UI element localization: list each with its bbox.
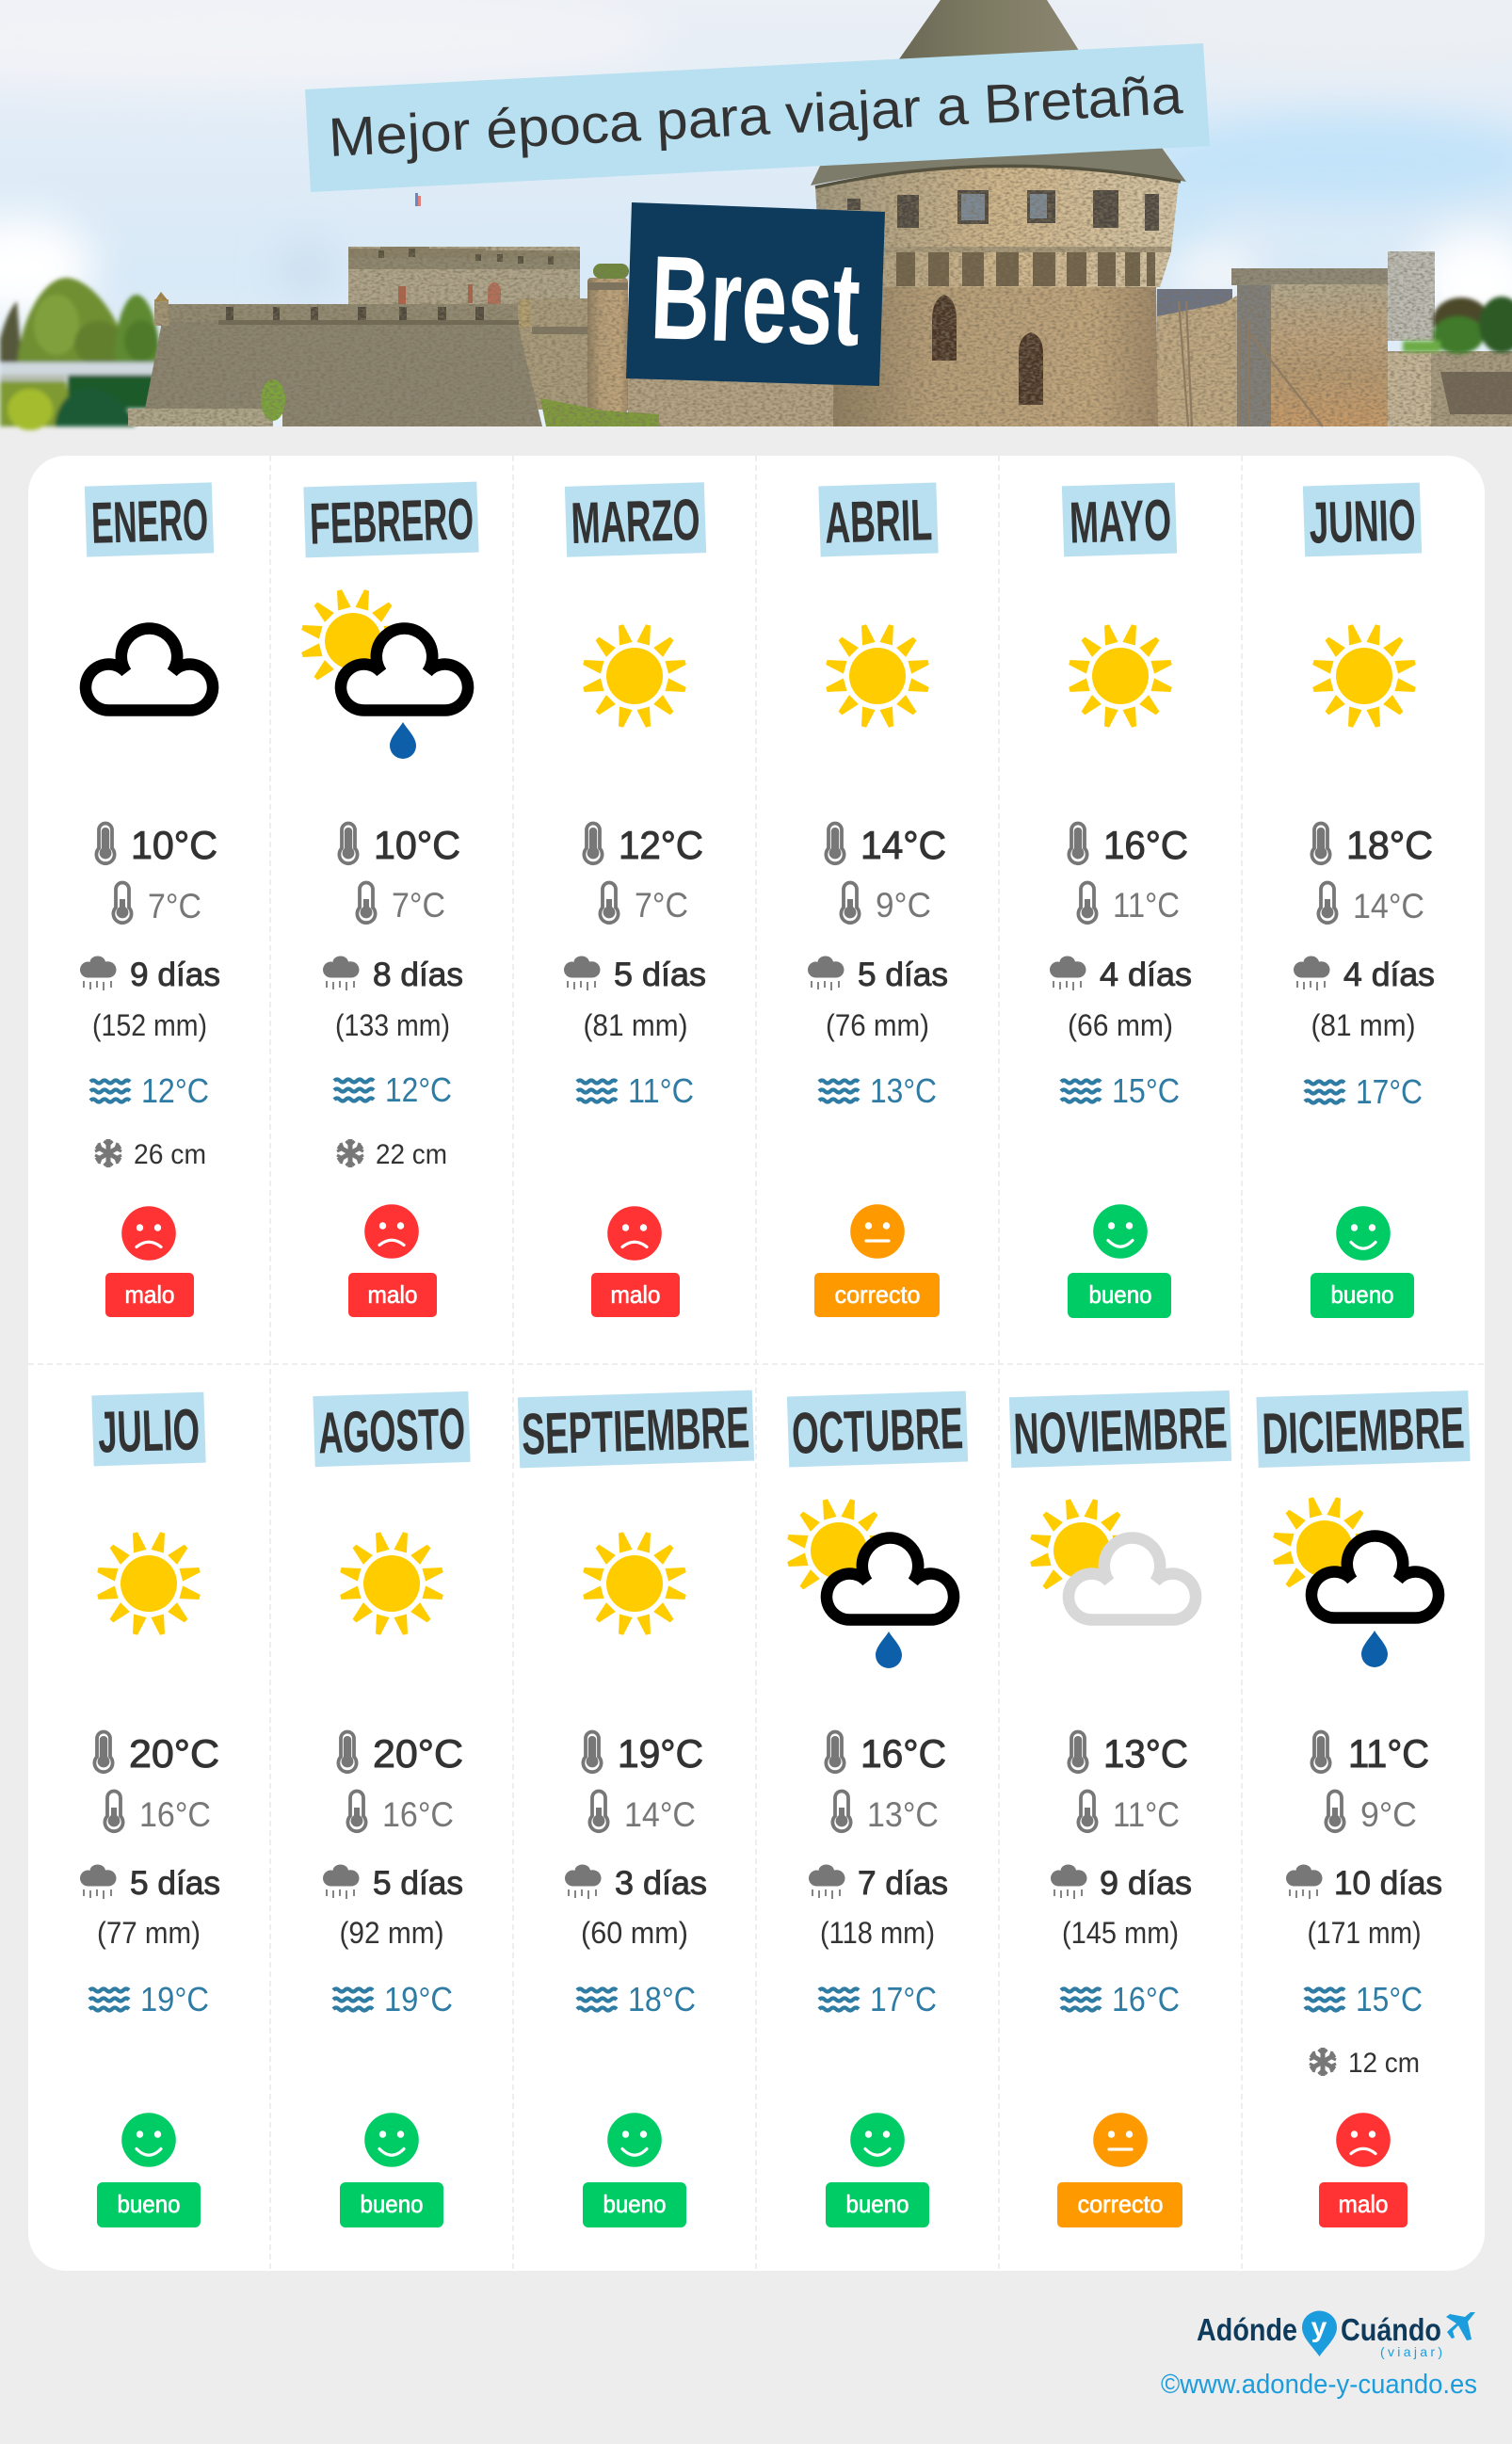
sea temperature [1061, 1980, 1180, 2018]
max temperature: 18°C [1346, 823, 1433, 867]
snow [95, 1139, 206, 1170]
rain days: 8 días [373, 957, 463, 993]
sea temperature: 18°C [628, 1980, 696, 2018]
rain days [565, 1865, 707, 1902]
min temperature [1318, 883, 1424, 925]
min temperature: 11°C [1113, 1795, 1180, 1834]
max temperature: 10°C [131, 823, 217, 867]
min temperature [1078, 1791, 1180, 1834]
right buildings [1157, 289, 1232, 317]
boat masts [1179, 301, 1323, 426]
rain days [564, 957, 706, 993]
rain days: 5 días [858, 957, 948, 993]
rain days [80, 957, 220, 993]
icon: sun, cloud and rain [300, 588, 468, 759]
panel: Marzo [564, 482, 706, 1317]
panel: Octubre [786, 1391, 968, 2227]
sea temperature [819, 1980, 937, 2018]
min temperature: 7°C [392, 886, 445, 925]
rating: malo: malo [610, 1280, 661, 1309]
rating: bueno [340, 2113, 443, 2227]
month heading: OCTUBRE [791, 1396, 964, 1467]
icon: map pin [1302, 2310, 1337, 2356]
sea temperature [577, 1980, 696, 2018]
rain days: 3 días [615, 1865, 707, 1902]
max temperature [826, 823, 946, 867]
month heading [818, 483, 939, 556]
rating: bueno: bueno [1088, 1280, 1152, 1309]
rainfall: (81 mm) [584, 1008, 687, 1042]
flag [415, 193, 421, 206]
rating: bueno [97, 2113, 201, 2227]
windows [847, 190, 1159, 231]
rainfall: (118 mm) [820, 1916, 935, 1950]
min temperature: 11°C [1113, 886, 1180, 925]
middle wall [517, 298, 590, 410]
max temperature: 11°C [1348, 1731, 1429, 1776]
month heading [303, 482, 479, 557]
min temperature: 7°C [635, 886, 688, 925]
sea temperature: 12°C [141, 1071, 209, 1110]
machicolations [896, 252, 1155, 286]
month heading [565, 482, 706, 557]
main tower lower [833, 282, 1158, 426]
month heading: SEPTIEMBRE [521, 1395, 750, 1468]
min temperature [1326, 1791, 1417, 1834]
rain days [809, 1865, 948, 1902]
rainfall: (76 mm) [826, 1008, 929, 1042]
icon: sun [825, 623, 930, 729]
rating: correcto [814, 1204, 940, 1317]
rating: malo: malo [367, 1280, 418, 1309]
panel: Mayo [1050, 483, 1192, 1318]
max temperature: 20°C [373, 1731, 463, 1776]
rain days: 10 días [1334, 1865, 1442, 1902]
upper round keep [348, 247, 580, 307]
rainfall: (145 mm) [1062, 1916, 1179, 1950]
min temperature [600, 883, 688, 925]
month heading [91, 1392, 206, 1466]
month heading [518, 1391, 754, 1468]
month heading [1009, 1391, 1231, 1468]
max temperature: 12°C [619, 823, 703, 867]
panel: Junio [1294, 483, 1435, 1318]
rain days: 9 días [130, 957, 220, 993]
rain days [1294, 957, 1435, 993]
city name: Brest [649, 231, 862, 371]
min temperature [832, 1791, 939, 1834]
rain days: 4 días [1100, 957, 1192, 993]
rating: correcto: correcto [834, 1280, 921, 1309]
panel: Julio [80, 1392, 220, 2227]
month heading [1062, 483, 1177, 556]
rain days: 9 días [1100, 1865, 1192, 1902]
right tower [1271, 284, 1388, 426]
sea temperature: 11°C [628, 1071, 694, 1110]
snow [337, 1139, 447, 1170]
sea temperature [89, 1980, 209, 2018]
min temperature: 16°C [139, 1795, 211, 1834]
min temperature: 9°C [876, 886, 931, 925]
city name box [626, 202, 885, 386]
icon: sun [339, 1531, 444, 1636]
max temperature: 14°C [861, 823, 946, 867]
rating: bueno: bueno [117, 2190, 181, 2218]
logo: Adónde y Cuándo: (viajar) [1380, 2344, 1442, 2359]
month heading [787, 1391, 968, 1467]
icon: cloud [86, 629, 213, 711]
snow [1310, 2048, 1420, 2079]
title banner [305, 43, 1210, 192]
sea temperature: 19°C [384, 1980, 453, 2018]
panel: monthly calendar card [28, 456, 1485, 2271]
rating: malo [105, 1206, 194, 1317]
sea temperature: 19°C [140, 1980, 209, 2018]
sea temperature: 17°C [870, 1980, 937, 2018]
sea temperature [577, 1071, 694, 1110]
rating: correcto: correcto [1077, 2190, 1164, 2218]
month heading: JULIO [97, 1397, 201, 1466]
snow: 22 cm [376, 1139, 447, 1170]
sea temperature [819, 1071, 937, 1110]
rating: bueno: bueno [1331, 1280, 1393, 1309]
max temperature: 19°C [618, 1731, 703, 1776]
max temperature: 20°C [129, 1731, 219, 1776]
rating: malo [348, 1204, 437, 1317]
panel: Enero [80, 482, 220, 1317]
max temperature [1069, 823, 1188, 867]
rainfall: (152 mm) [92, 1008, 207, 1042]
month heading [1303, 483, 1422, 556]
rating: malo: malo [1339, 2190, 1388, 2218]
rainfall: (66 mm) [1068, 1008, 1173, 1042]
rating: bueno: bueno [845, 2190, 909, 2218]
month heading: ENERO [90, 488, 209, 556]
title: Mejor época para viajar a Bretaña [327, 64, 1184, 169]
rating: malo [591, 1206, 680, 1317]
icon: map pin: y [1311, 2312, 1327, 2343]
arched windows [932, 295, 957, 361]
panel: Septiembre [518, 1391, 754, 2227]
rain days [1050, 957, 1192, 993]
min temperature: 14°C [624, 1795, 696, 1834]
logo: Adónde y Cuándo [1197, 2310, 1475, 2359]
icon: sun, cloud and rain [1272, 1496, 1439, 1667]
min temperature [589, 1791, 696, 1834]
rainfall: (133 mm) [335, 1008, 450, 1042]
month heading: MAYO [1069, 488, 1172, 556]
icon: sun [582, 623, 687, 729]
rainfall: (60 mm) [581, 1916, 688, 1950]
right trees [1403, 297, 1512, 354]
min temperature [105, 1791, 211, 1834]
rating: bueno [1311, 1206, 1414, 1318]
max temperature: 10°C [374, 823, 460, 867]
rain days [323, 957, 463, 993]
min temperature [1078, 883, 1180, 925]
sea temperature: 16°C [1112, 1980, 1180, 2018]
sea temperature: 12°C [385, 1070, 452, 1109]
min temperature [113, 883, 201, 925]
rating: bueno [1068, 1204, 1171, 1318]
sea temperature: 15°C [1356, 1980, 1423, 2018]
rain days [80, 1865, 220, 1902]
rating: correcto [1057, 2113, 1182, 2227]
small round tower [587, 278, 628, 412]
month heading: FEBRERO [309, 487, 475, 557]
rain days [1051, 1865, 1192, 1902]
main rampart [145, 322, 542, 426]
rating: bueno [826, 2113, 929, 2227]
pale far tower [1388, 251, 1435, 341]
month heading: NOVIEMBRE [1013, 1395, 1229, 1468]
sea temperature [334, 1070, 452, 1109]
rain days: 5 días [373, 1865, 463, 1902]
month heading: MARZO [571, 488, 701, 556]
rainfall: (171 mm) [1307, 1916, 1422, 1950]
max temperature [583, 1731, 703, 1776]
sea temperature [1305, 1072, 1423, 1111]
rating: bueno [583, 2113, 686, 2227]
min temperature: 13°C [867, 1795, 939, 1834]
logo: Adónde y Cuándo: Adónde [1197, 2312, 1297, 2347]
min temperature: 16°C [382, 1795, 454, 1834]
logo: Adónde y Cuándo: Cuándo [1341, 2312, 1441, 2347]
month heading: JUNIO [1309, 488, 1417, 556]
min temperature: 7°C [148, 887, 201, 925]
rainfall: (92 mm) [339, 1916, 444, 1950]
panel: Abril [808, 483, 948, 1317]
month heading: AGOSTO [317, 1397, 466, 1466]
icon: sun [1311, 623, 1417, 729]
rating: malo: malo [124, 1280, 175, 1309]
max temperature: 13°C [1103, 1731, 1188, 1776]
sea temperature [333, 1980, 453, 2018]
sea temperature: 13°C [870, 1071, 937, 1110]
rain days: 5 días [130, 1865, 220, 1902]
panel: Diciembre [1256, 1391, 1471, 2227]
rainfall: (77 mm) [97, 1916, 201, 1950]
grass [540, 398, 659, 426]
max temperature [826, 1731, 946, 1776]
rain days: 5 días [614, 957, 706, 993]
panel: Noviembre [1009, 1391, 1231, 2227]
panel: Agosto [313, 1391, 471, 2227]
max temperature [1069, 1731, 1188, 1776]
min temperature: 14°C [1353, 887, 1424, 925]
trees left [0, 278, 160, 430]
month heading [85, 482, 214, 557]
max temperature: 16°C [861, 1731, 946, 1776]
snow: 12 cm [1348, 2048, 1420, 2079]
max temperature [1311, 1731, 1429, 1776]
sea temperature [90, 1071, 209, 1110]
conical roof [894, 0, 1083, 66]
rain days: 4 días [1343, 957, 1435, 993]
min temperature [347, 1791, 454, 1834]
max temperature [584, 823, 703, 867]
month heading [313, 1391, 471, 1467]
rain days: 7 días [858, 1865, 948, 1902]
min temperature: 9°C [1360, 1795, 1417, 1834]
upper drum [815, 165, 1179, 287]
icon: sun [1068, 623, 1173, 729]
icon: sun, cloud and rain [786, 1498, 954, 1668]
rain days [808, 957, 948, 993]
sea temperature: 17°C [1356, 1072, 1423, 1111]
sea temperature: 15°C [1112, 1071, 1180, 1110]
header photo: Brest castle [0, 0, 1512, 430]
rating: malo [1319, 2113, 1407, 2227]
rain days [1286, 1865, 1442, 1902]
max temperature: 16°C [1103, 823, 1188, 867]
sea temperature [1061, 1071, 1180, 1110]
icon: sun [582, 1531, 687, 1636]
min temperature [841, 883, 931, 925]
rain days [323, 1865, 463, 1902]
icon: plane [1446, 2312, 1475, 2340]
rainfall: (81 mm) [1311, 1008, 1416, 1042]
month heading: ABRIL [824, 488, 933, 556]
icon: sun [96, 1531, 201, 1636]
sea temperature [1305, 1980, 1423, 2018]
rating: bueno: bueno [603, 2190, 667, 2218]
panel: Febrero [300, 482, 479, 1317]
icon: sun and light cloud [1029, 1498, 1196, 1620]
rating: bueno: bueno [360, 2190, 424, 2218]
min temperature [357, 883, 445, 925]
snow: 26 cm [134, 1139, 206, 1170]
website credit: ©www.adonde-y-cuando.es [1161, 2370, 1477, 2400]
